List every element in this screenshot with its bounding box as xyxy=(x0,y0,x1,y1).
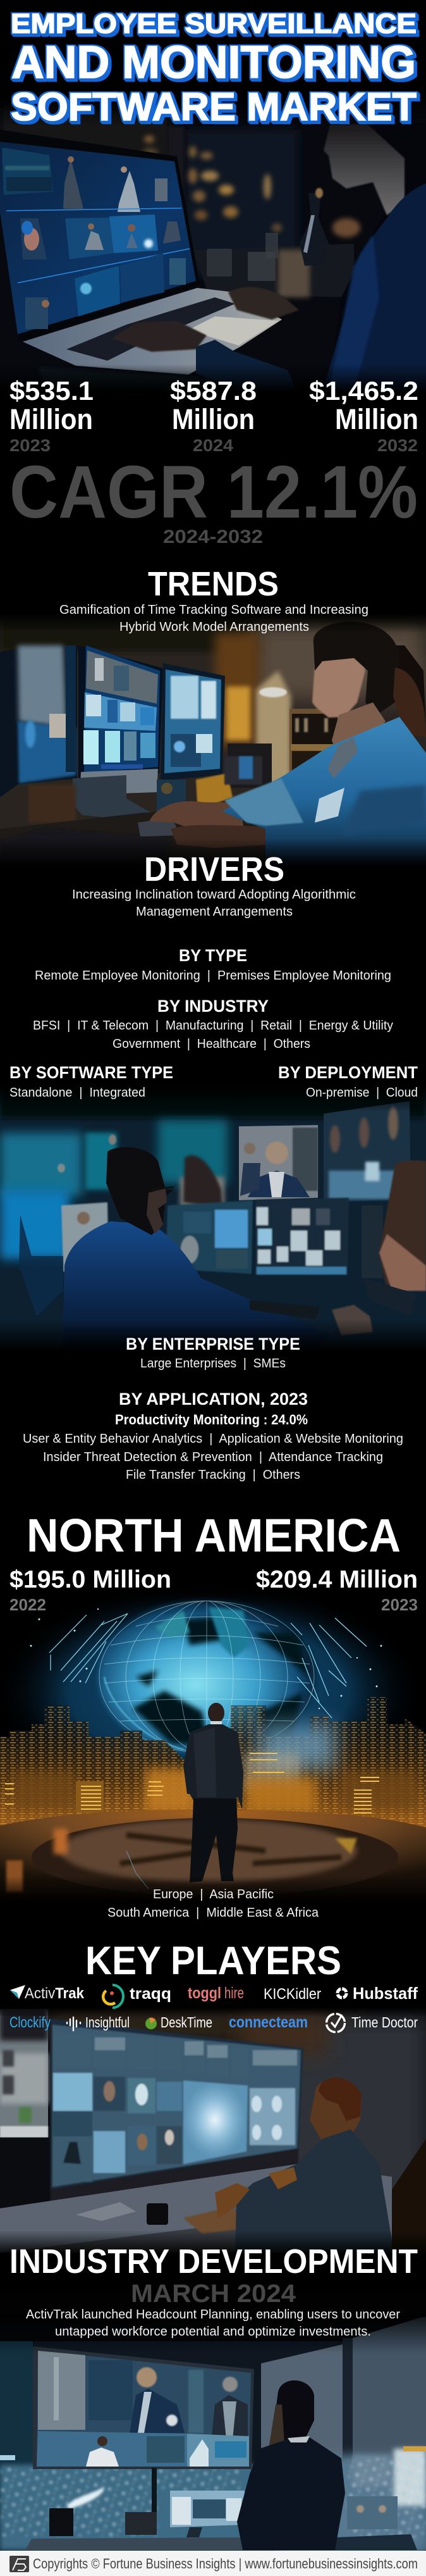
segment: by industry xyxy=(33,997,394,1051)
logo: connecteam: connecteam xyxy=(229,2013,308,2031)
key players heading: KEY PLAYERS xyxy=(85,1939,341,1983)
woman in dark blazer xyxy=(322,123,426,392)
segment: by application: File Transfer Tracking | Others xyxy=(126,1467,300,1482)
left small monitor xyxy=(19,1202,109,1316)
development description: ActivTrak launched Headcount Planning, enabling users to uncover xyxy=(26,2307,400,2322)
photo: woman at multiple monitors xyxy=(0,614,426,867)
segment: by software type xyxy=(9,1063,173,1100)
logo: DeskTime xyxy=(145,2014,212,2031)
region heading: North America: NORTH AMERICA xyxy=(27,1509,401,1562)
North America value 2022 xyxy=(9,1566,171,1614)
foreground monitor dashboards xyxy=(166,1198,383,1278)
stat: 2032: $1,465.2 xyxy=(309,376,418,406)
glowing globe xyxy=(98,1600,315,1754)
key player logos xyxy=(9,1984,418,2032)
other regions: South America | Middle East & Africa xyxy=(107,1905,319,1920)
trends text: Gamification of Time Tracking Software and Increasing xyxy=(59,602,368,617)
segment: by deployment xyxy=(278,1063,418,1100)
photo: man in control room with monitors xyxy=(0,1086,426,1351)
North America value 2023: 2023 xyxy=(381,1595,418,1614)
center monitor with video tiles xyxy=(78,645,163,795)
segment: by industry: BY INDUSTRY xyxy=(157,997,269,1016)
segment: by industry: Government | Healthcare | Others xyxy=(113,1036,310,1051)
segment: by type: BY TYPE xyxy=(179,946,247,965)
segment: by software type: Standalone | Integrated xyxy=(9,1085,145,1100)
segment: by application: Productivity Monitoring : 24.0% xyxy=(115,1412,308,1428)
development description xyxy=(26,2307,400,2339)
segment: by application: User & Entity Behavior Analytics | Application & Website Monitoring xyxy=(23,1431,403,1446)
stat: 2023: $535.1 xyxy=(9,376,94,406)
logo: Time Doctor xyxy=(326,2013,418,2032)
segment: by type xyxy=(35,946,391,983)
desk with small monitors xyxy=(25,2491,417,2550)
title: SOFTWARE MARKET xyxy=(11,85,417,129)
left monitor xyxy=(0,645,77,797)
logo: Hubstaff: Hubstaff xyxy=(353,1984,418,2003)
desk and stand xyxy=(0,756,265,867)
walls and windows xyxy=(0,2316,426,2550)
icon: Fortune Business Insights logo xyxy=(9,2556,29,2572)
man in dark shirt xyxy=(215,2077,426,2260)
photo: man at a wall of video screens xyxy=(0,2007,426,2262)
CAGR period: 2024-2032 xyxy=(163,526,263,547)
drivers text: Management Arrangements xyxy=(136,904,293,919)
logo: Clockify: Clockify xyxy=(9,2014,51,2031)
glasses and vase xyxy=(207,188,329,281)
logo: Insightful xyxy=(67,2014,130,2031)
stat: 2032: Million xyxy=(335,403,418,435)
footer bar xyxy=(0,2551,426,2576)
laptop keyboard base xyxy=(23,288,282,376)
man in suit seen from behind xyxy=(183,1703,243,1882)
logo: traqq: traqq xyxy=(130,1985,171,2003)
logo: Kickidler: KICKidler xyxy=(264,1986,321,2003)
desk xyxy=(0,2164,392,2260)
development description: untapped workforce potential and optimize investments. xyxy=(55,2324,371,2339)
rooftop platform xyxy=(0,1810,426,1901)
logo: toggl hire: togglhire xyxy=(188,1984,244,2002)
segment: by enterprise type: Large Enterprises | SMEs xyxy=(140,1356,286,1371)
other regions xyxy=(107,1887,319,1920)
hands xyxy=(149,801,269,848)
stat: 2032 xyxy=(309,376,418,455)
segment: by application: BY APPLICATION, 2023 xyxy=(119,1390,308,1409)
trends text: Hybrid Work Model Arrangements xyxy=(119,619,309,634)
North America value 2022: 2022 xyxy=(9,1595,46,1614)
large video wall xyxy=(33,2346,254,2512)
segment: by industry: BFSI | IT & Telecom | Manufacturing | Retail | Energy & Utility xyxy=(33,1018,394,1033)
photo: woman using laptop with monitoring dashboard xyxy=(0,95,426,400)
stat: 2024 xyxy=(170,376,257,455)
man in dark suit xyxy=(237,2380,345,2550)
title: EMPLOYEE SURVEILLANCE xyxy=(11,8,417,39)
drivers text xyxy=(72,887,356,919)
woman at right edge xyxy=(379,1160,426,1291)
stat: 2024: 2024 xyxy=(193,436,233,455)
photo: man overlooking city beside video wall xyxy=(0,2291,426,2551)
wall screen with presenter xyxy=(239,1125,318,1200)
stat: 2023 xyxy=(9,376,94,455)
North America value 2023 xyxy=(256,1566,418,1614)
window at left xyxy=(0,2009,51,2137)
trends text xyxy=(59,602,368,634)
keyboard and hand xyxy=(250,1278,417,1335)
development date: MARCH 2024 xyxy=(131,2280,296,2308)
segment: by enterprise type: BY ENTERPRISE TYPE xyxy=(126,1335,300,1353)
segment: by application: Insider Threat Detection & Prevention | Attendance Tracking xyxy=(43,1450,383,1464)
North America value 2022: $195.0 Million xyxy=(9,1566,171,1593)
segment: by enterprise type xyxy=(126,1335,300,1371)
city bokeh lights xyxy=(0,2458,426,2537)
North America value 2023: $209.4 Million xyxy=(256,1566,418,1593)
market size stats xyxy=(9,376,418,455)
hands and sleeve xyxy=(111,287,299,392)
title xyxy=(11,8,417,129)
stat: 2023: Million xyxy=(9,403,93,435)
data streaks and stars xyxy=(49,1614,367,1718)
man with glasses xyxy=(63,1147,308,1325)
logo: ActivTrak: ActivTrak xyxy=(25,1985,85,2002)
drivers heading: DRIVERS xyxy=(144,850,284,888)
night city skyline xyxy=(0,1696,426,1829)
stat: 2024: $587.8 xyxy=(170,376,257,406)
other regions: Europe | Asia Pacific xyxy=(153,1887,274,1901)
logo: DeskTime: DeskTime xyxy=(161,2014,212,2031)
stat: 2032: 2032 xyxy=(377,436,418,455)
table surface xyxy=(193,244,354,297)
stat: 2023: 2023 xyxy=(9,436,51,455)
segment: by deployment: On-premise | Cloud xyxy=(306,1085,418,1100)
segment: by type: Remote Employee Monitoring | Premises Employee Monitoring xyxy=(35,968,391,983)
logo: Insightful: Insightful xyxy=(85,2014,130,2031)
drivers text: Increasing Inclination toward Adopting Algorithmic xyxy=(72,887,356,902)
segment: by software type: BY SOFTWARE TYPE xyxy=(9,1063,173,1082)
right wall screens xyxy=(324,1101,411,1202)
stat: 2024: Million xyxy=(172,403,255,435)
segment: by deployment: BY DEPLOYMENT xyxy=(278,1063,418,1082)
segment: by application xyxy=(23,1390,403,1482)
monitor wall xyxy=(51,2019,303,2212)
right monitor xyxy=(161,663,225,781)
logo: traqq xyxy=(103,1985,171,2008)
photo: man facing a digital globe above a city xyxy=(0,1582,426,1901)
title: AND MONITORING xyxy=(11,37,416,88)
trends heading: TRENDS xyxy=(148,565,279,603)
woman in blue shirt xyxy=(222,621,426,867)
laptop screen xyxy=(0,130,200,342)
